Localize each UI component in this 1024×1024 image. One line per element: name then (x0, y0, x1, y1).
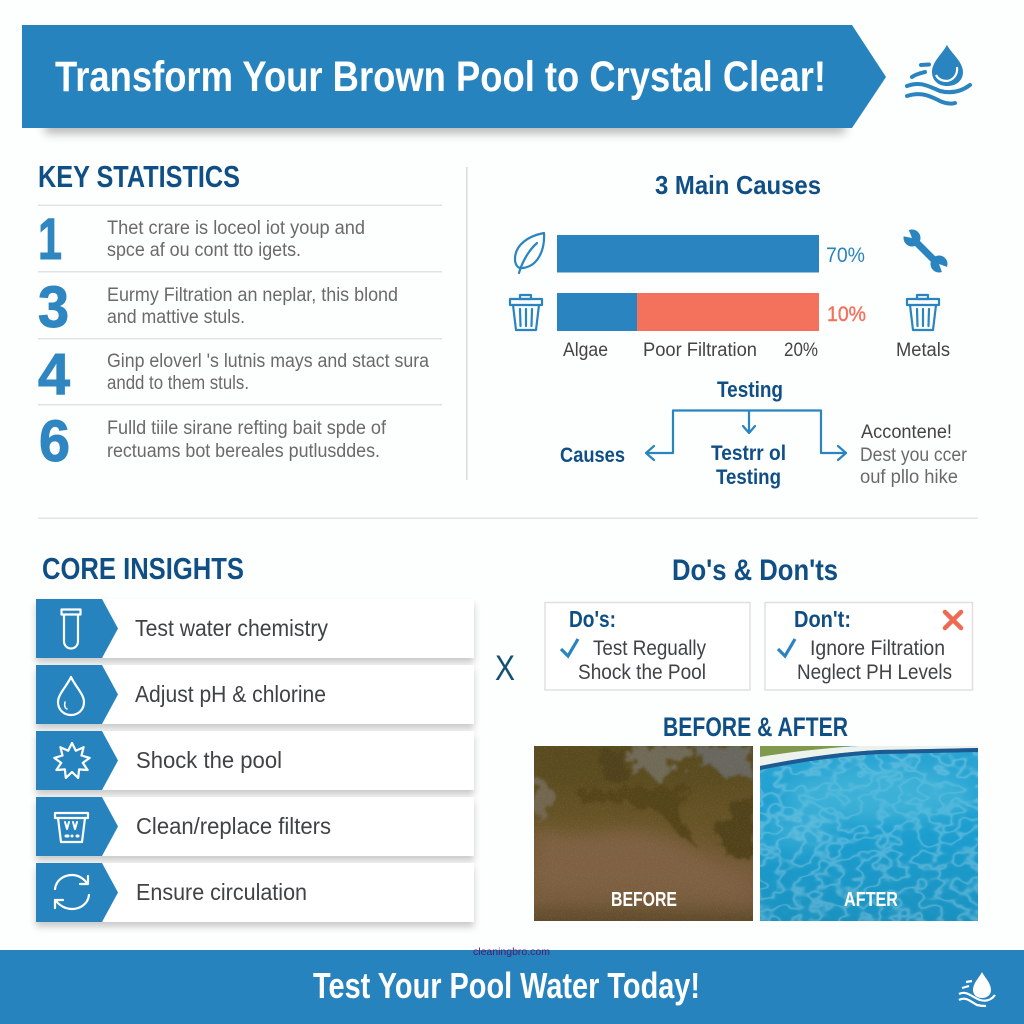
stat 3: Ginp eloverl 's lutnis mays and stact sura (107, 351, 429, 372)
bar chart: 10% (827, 303, 866, 326)
panel: 3 main causes (510, 170, 950, 361)
heading: core insights: CORE INSIGHTS (42, 551, 244, 586)
flow diagram: Causes (560, 444, 625, 467)
icon: trash bin left (510, 295, 542, 330)
panel: key statistics (38, 159, 442, 474)
stat 4 (39, 409, 387, 474)
insight: test water chemistry: Test water chemistry (135, 615, 328, 641)
insight: adjust ph and chlorine (36, 665, 474, 724)
panel: before and after (534, 712, 978, 921)
bar chart: 70% (826, 244, 865, 267)
insight: adjust ph and chlorine: Adjust pH & chlorine (135, 681, 326, 707)
heading: key statistics: KEY STATISTICS (38, 159, 240, 194)
icon: leaf (515, 233, 544, 273)
flow diagram: Testing (717, 377, 783, 402)
photo: brown pool before (534, 746, 753, 921)
card: dos (545, 602, 750, 690)
insight: clean or replace filters: Clean/replace filters (136, 813, 331, 839)
card: dos: Test Regually (593, 637, 706, 660)
insight: shock the pool: Shock the pool (136, 747, 282, 773)
heading: dos and donts: Do's & Don'ts (672, 554, 838, 587)
insight: ensure circulation: Ensure circulation (136, 879, 307, 905)
insight: clean or replace filters (36, 797, 474, 856)
card: donts: Don't: (794, 606, 851, 632)
stat 3 (38, 342, 429, 407)
insight: test water chemistry (36, 599, 474, 658)
card: donts: Ignore Filtration (810, 637, 945, 660)
flow diagram: Dest you ccer (860, 445, 968, 466)
stat 4: 6 (39, 409, 70, 474)
flow diagram: Testrr ol (711, 442, 786, 465)
stat 2: 3 (38, 275, 69, 340)
stat 1 (38, 207, 365, 272)
icon: water drop with waves (907, 45, 970, 104)
stat 2: Eurmy Filtration an neplar, this blond (107, 285, 398, 306)
label: metals: Metals (896, 340, 950, 361)
flow diagram: Testing (716, 466, 781, 489)
icon: red x (945, 612, 961, 628)
watermark: cleaningbro.com (473, 946, 550, 958)
footer banner (0, 950, 1024, 1024)
icon: trash bin right (907, 295, 939, 330)
card: donts: Neglect PH Levels (797, 661, 952, 684)
label: after: AFTER (844, 889, 898, 911)
panel: dos and donts (545, 554, 972, 690)
flow diagram: ouf pllo hike (860, 467, 958, 488)
bar chart (557, 235, 866, 361)
bar chart: Algae (563, 340, 608, 361)
icon: wrench (902, 228, 950, 275)
heading: before and after: BEFORE & AFTER (663, 712, 848, 742)
photo: clear pool after (760, 745, 978, 921)
bar chart: Poor Filtration (643, 340, 757, 361)
card: dos: Shock the Pool (578, 661, 706, 684)
stat 3: 4 (38, 342, 70, 407)
stray x mark: X (495, 649, 515, 688)
bar chart: 20% (784, 340, 818, 361)
card: donts (765, 602, 972, 690)
stat 4: Fulld tiile sirane refting bait spde of (107, 418, 387, 439)
title: Transform Your Brown Pool to Crystal Clear! (55, 53, 826, 101)
heading: 3 main causes: 3 Main Causes (655, 170, 821, 200)
panel: core insights (36, 551, 474, 922)
stat 2: and mattive stuls. (107, 307, 245, 328)
stat 1: spce af ou cont tto igets. (107, 240, 301, 261)
flow diagram: Accontene! (861, 422, 952, 443)
stat 4: rectuams bot bereales putlusddes. (107, 441, 380, 462)
insight: shock the pool (36, 731, 474, 790)
stat 3: andd to them stuls. (107, 373, 249, 394)
label: before: BEFORE (611, 889, 677, 911)
call to action: Test Your Pool Water Today! (313, 965, 700, 1006)
icon: footer water drop (959, 972, 995, 1006)
insight: ensure circulation (36, 863, 474, 922)
card: dos: Do's: (569, 606, 616, 632)
stat 2 (38, 275, 398, 340)
header banner (22, 25, 886, 133)
flow diagram (560, 377, 968, 489)
stat 1: Thet crare is loceol iot youp and (107, 218, 365, 239)
stat 1: 1 (38, 207, 62, 272)
